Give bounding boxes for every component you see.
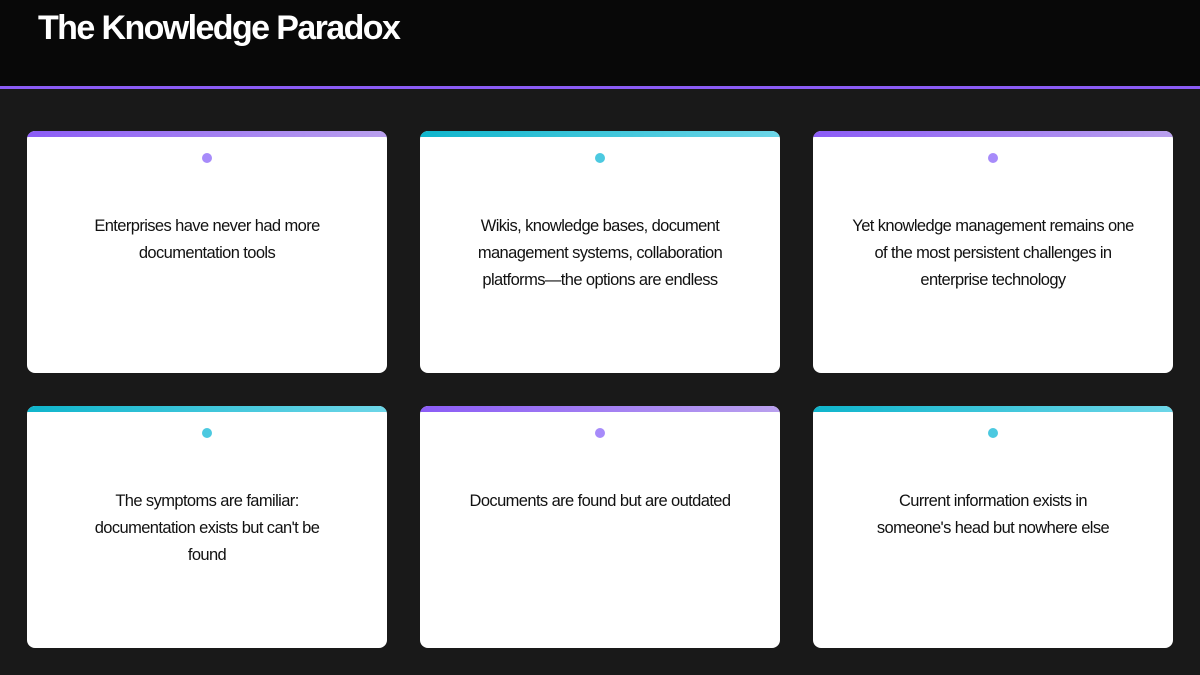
text 4: The symptoms are familiar: documentation exists but can't be found [95, 492, 319, 564]
text 3: Yet knowledge management remains one of the most persistent challenges in enterprise technology [852, 217, 1134, 289]
text 1: Enterprises have never had more documentation tools [94, 217, 320, 262]
card 1 [27, 131, 387, 373]
text 2: Wikis, knowledge bases, document management systems, collaboration platforms—the options are endless [478, 217, 722, 289]
card 4 [27, 406, 387, 648]
text 5: Documents are found but are outdated [470, 492, 730, 510]
title: The Knowledge Paradox [38, 9, 399, 47]
card 5 [420, 406, 780, 648]
text 6: Current information exists in someone's head but nowhere else [877, 492, 1109, 537]
card 2 [420, 131, 780, 373]
header [0, 0, 1200, 89]
card 3 [813, 131, 1173, 373]
card 6 [813, 406, 1173, 648]
